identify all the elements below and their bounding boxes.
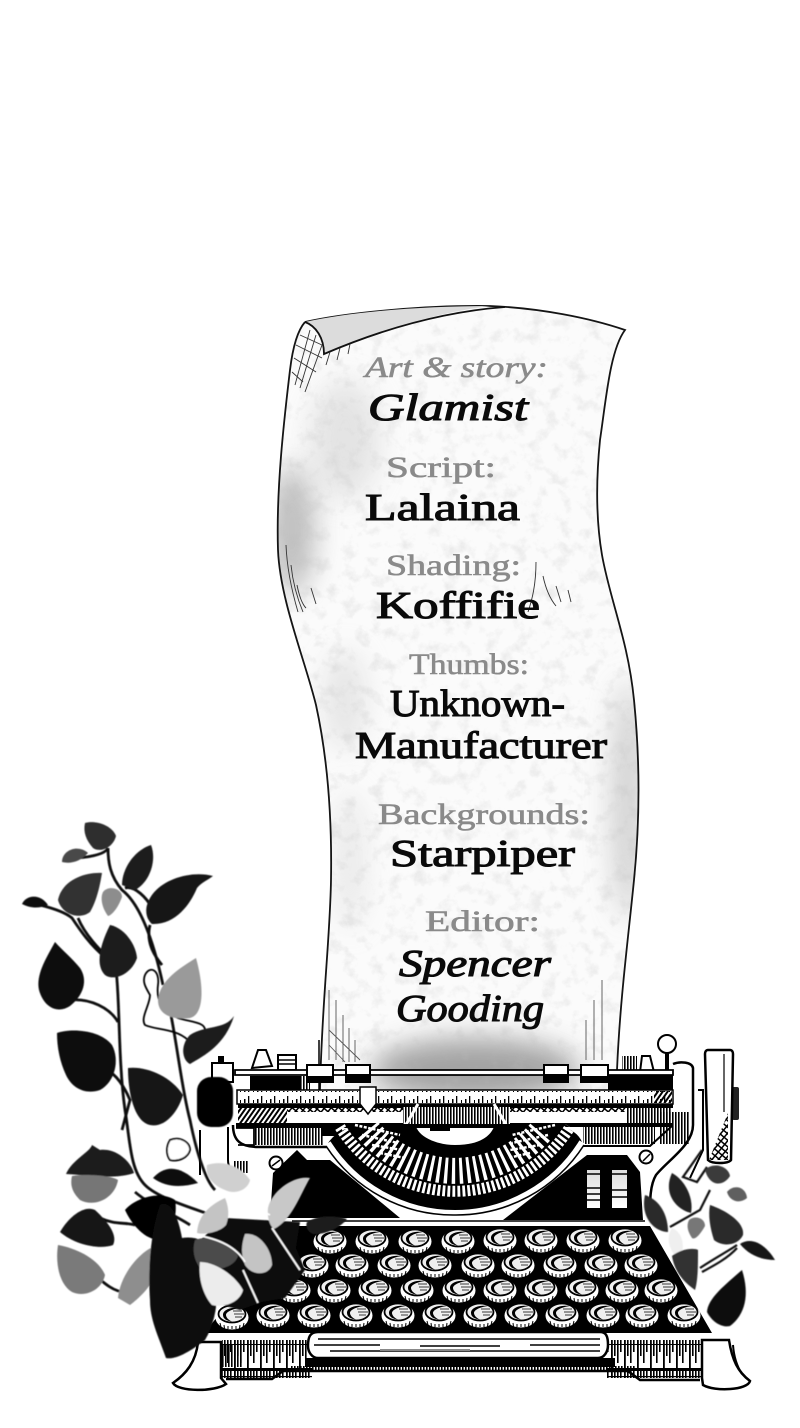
leaf xyxy=(672,1249,698,1290)
credit: backgrounds: Backgrounds: xyxy=(378,798,590,831)
leaf xyxy=(705,1165,730,1184)
leaf xyxy=(60,1209,114,1247)
credit: art & story: Glamist xyxy=(368,387,530,429)
credit: art & story: Art & story: xyxy=(363,351,548,384)
icon: lower lever loop xyxy=(167,1139,190,1161)
typewriter: left foot xyxy=(173,1342,226,1390)
typewriter: black side panels xyxy=(270,1150,643,1220)
typewriter: keyboard bed xyxy=(204,1226,712,1333)
leaf xyxy=(71,1175,118,1203)
leaf xyxy=(207,1163,250,1192)
leaf xyxy=(709,1205,743,1244)
leaf xyxy=(242,1234,272,1273)
credit: shading: Koffifie xyxy=(376,585,540,627)
plant left xyxy=(22,822,347,1358)
plant right xyxy=(644,1150,775,1326)
blob: dark leaf over frame xyxy=(197,1077,233,1127)
typewriter: base xyxy=(173,1336,750,1389)
leaf xyxy=(62,849,88,863)
leaf xyxy=(57,1031,116,1092)
typewriter xyxy=(173,1035,750,1390)
typewriter: platen rail and blocks xyxy=(212,1056,673,1082)
leaf xyxy=(688,1218,705,1238)
typewriter: left mechanism xyxy=(200,1040,406,1176)
leaf xyxy=(125,1195,176,1240)
typewriter: right frame xyxy=(650,1062,703,1215)
credit: script: Script: xyxy=(386,451,496,484)
leaf xyxy=(84,822,116,850)
blob: dark foliage mass xyxy=(149,1204,217,1358)
leaf xyxy=(200,1262,243,1306)
credit: editor xyxy=(396,905,551,1030)
leaf xyxy=(669,1173,692,1213)
leaf xyxy=(128,1068,183,1125)
credit: thumbs: Manufacturer xyxy=(355,725,607,767)
leaf xyxy=(102,888,122,916)
icon: hook lever xyxy=(144,970,205,1040)
leaf xyxy=(158,958,202,1018)
credit: backgrounds xyxy=(378,798,590,875)
leaf xyxy=(22,897,48,908)
credit: script xyxy=(365,451,520,529)
typewriter: frame body xyxy=(200,1062,693,1226)
icon: screws xyxy=(270,1150,652,1170)
leaf xyxy=(197,1198,228,1234)
credit: editor: Gooding xyxy=(396,988,544,1030)
leaf xyxy=(727,1187,747,1201)
blob: dark backing behind pale leaves xyxy=(200,1218,305,1310)
leaf xyxy=(118,1245,160,1305)
leaf xyxy=(57,1245,105,1294)
leaf xyxy=(268,1178,310,1229)
typewriter: space bar xyxy=(308,1332,608,1358)
leaf xyxy=(183,1016,234,1064)
typewriter: right knob xyxy=(705,1050,739,1163)
leaf xyxy=(306,1216,347,1234)
typewriter: right mechanism xyxy=(510,1056,673,1146)
credits text xyxy=(355,351,607,1030)
credit: shading xyxy=(376,549,540,627)
credit: shading: Shading: xyxy=(386,549,521,582)
leaf xyxy=(194,1238,238,1270)
credit: thumbs xyxy=(355,648,607,767)
leaf xyxy=(146,874,213,924)
icon: curled corner xyxy=(292,306,505,392)
leaf xyxy=(38,942,84,1009)
panel: paper sheet xyxy=(270,300,650,1102)
leaf xyxy=(644,1195,668,1232)
credit: thumbs: Thumbs: xyxy=(409,648,529,681)
credit: art & story xyxy=(363,351,548,429)
leaf xyxy=(707,1270,746,1326)
typewriter: side plates xyxy=(587,1170,627,1208)
leaf xyxy=(740,1241,775,1260)
typewriter: center hatch xyxy=(403,1104,510,1128)
leaf xyxy=(122,845,153,890)
credit: editor: Editor: xyxy=(425,905,540,938)
credit: script: Lalaina xyxy=(365,487,520,529)
typewriter: type basket fan xyxy=(326,1124,584,1215)
credit: backgrounds: Starpiper xyxy=(390,833,575,875)
plant: stems xyxy=(670,1150,737,1272)
credit: editor: Spencer xyxy=(399,943,551,985)
leaf xyxy=(153,1169,198,1186)
leaf xyxy=(669,1228,683,1260)
leaf xyxy=(100,925,137,977)
credit: thumbs: Unknown- xyxy=(390,683,565,725)
icon: top ball lever xyxy=(658,1035,676,1070)
typewriter: right foot xyxy=(702,1340,750,1389)
plant: stems xyxy=(40,848,225,1292)
leaf xyxy=(58,873,102,916)
full page illustration xyxy=(22,305,776,1392)
typewriter: scale bar xyxy=(237,1087,673,1114)
typewriter: keys xyxy=(216,1228,700,1330)
leaf xyxy=(66,1145,134,1177)
